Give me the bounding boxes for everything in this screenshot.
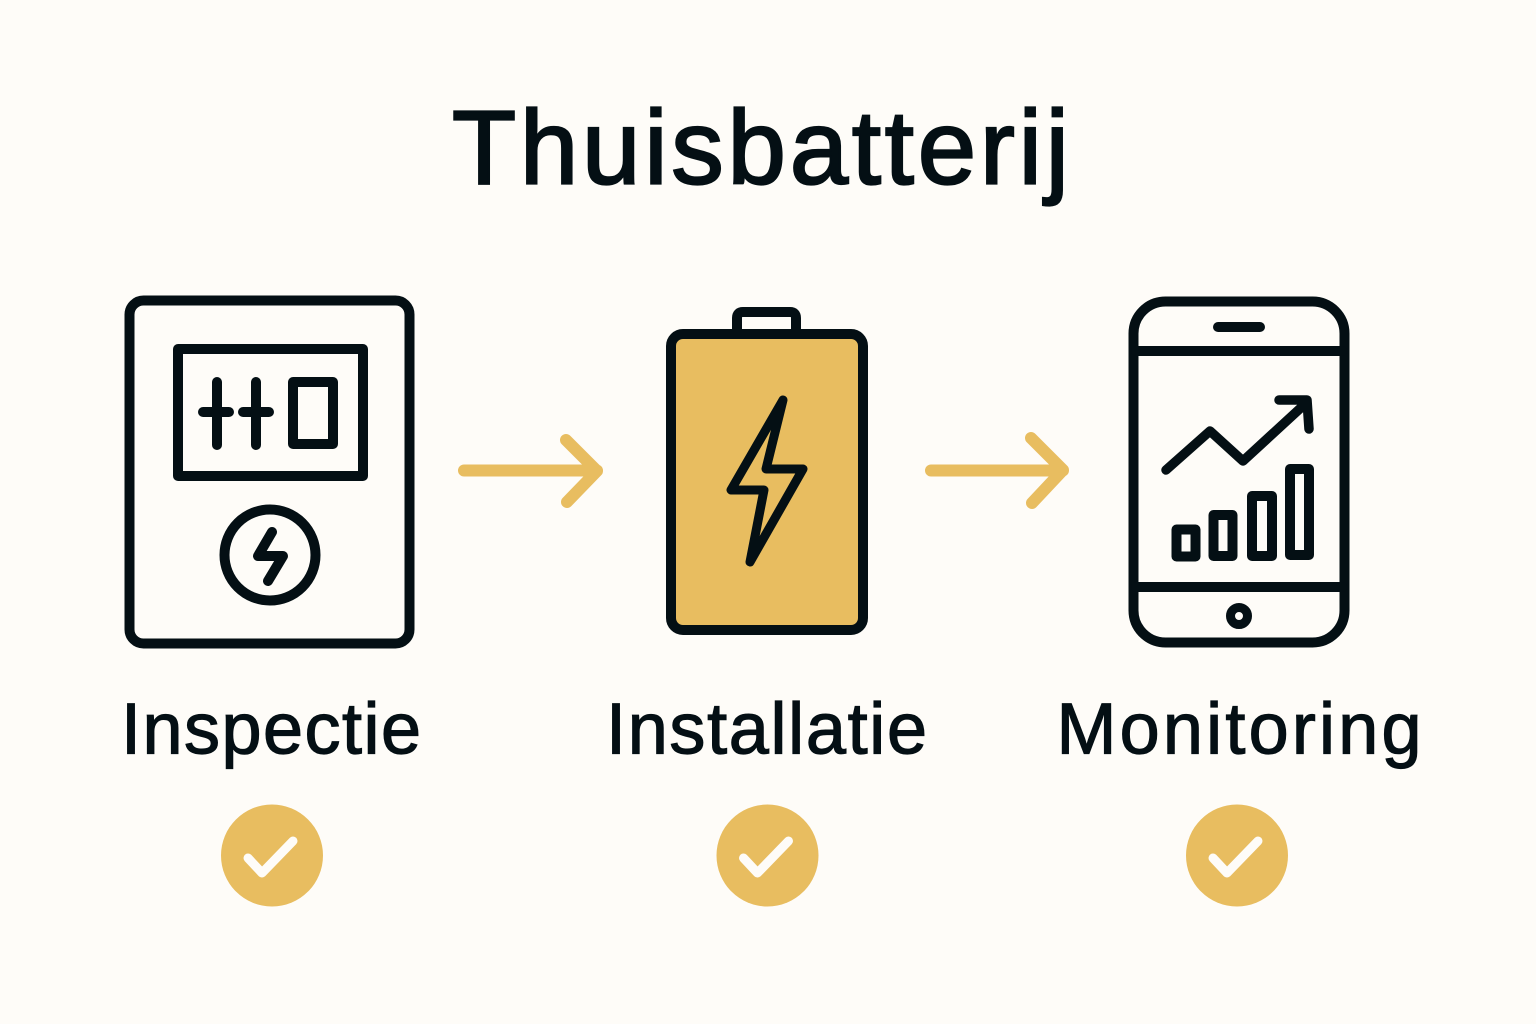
label: installatie: Installatie — [606, 690, 927, 770]
label: monitoring: Monitoring — [1056, 690, 1422, 770]
icon: battery — [671, 312, 863, 630]
panel: installatie — [606, 312, 927, 906]
title: Thuisbatterij — [452, 90, 1069, 206]
check badge: inspectie — [221, 804, 323, 906]
arrow: inspectie to installatie — [464, 440, 597, 502]
label: inspectie: Inspectie — [121, 690, 421, 770]
arrow: installatie to monitoring — [931, 438, 1063, 503]
panel: inspectie — [121, 300, 421, 906]
panel: monitoring — [1056, 302, 1422, 906]
check badge: monitoring — [1186, 804, 1288, 906]
icon: smartphone with chart — [1134, 302, 1344, 642]
icon: meter cabinet — [130, 300, 410, 644]
check badge: installatie — [716, 804, 818, 906]
